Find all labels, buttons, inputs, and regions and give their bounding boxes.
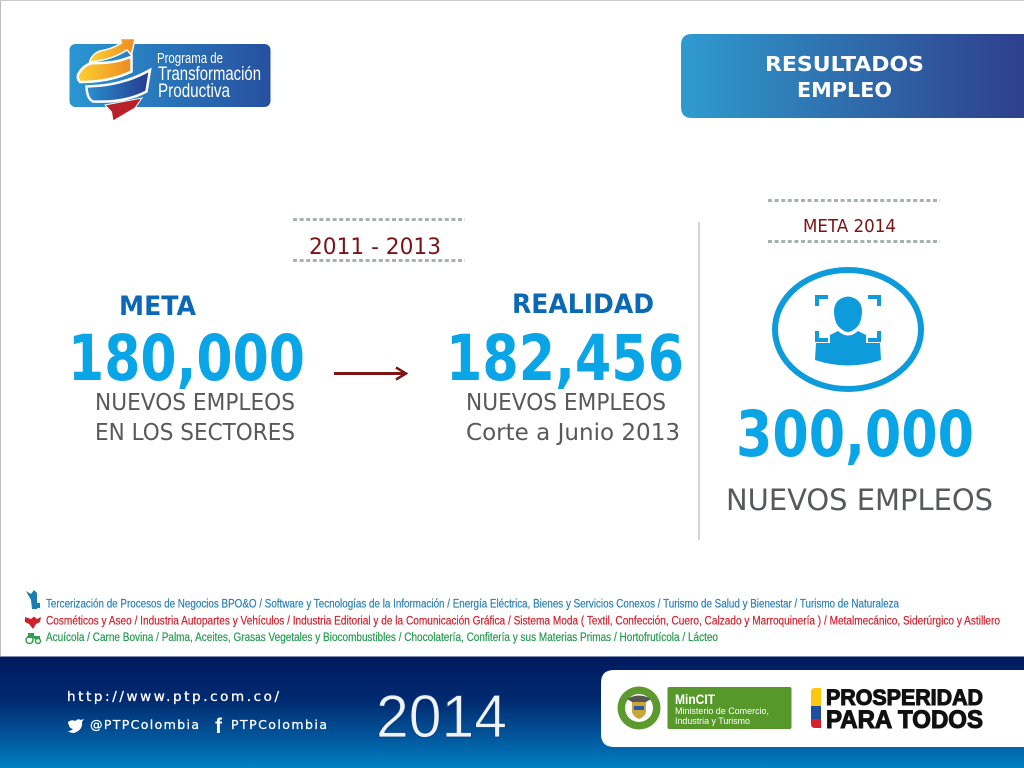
facebook handle: PTPColombia: [231, 717, 327, 732]
text: agro sectors: Acuícola / Carne Bovina / Palma, Aceites, Grasas Vegetales y Biocombustibles / Chocolatería, Confitería y sus Materias Primas / Hortofrutícola / Lácteo: [46, 632, 718, 644]
twitter handle: @PTPColombia: [90, 717, 199, 732]
arrow: meta to realidad: [334, 368, 406, 380]
period label: meta 2014: META 2014: [803, 216, 896, 237]
footer band: [0, 656, 1024, 768]
vertical divider: [698, 222, 700, 540]
icon: facebook f: f: [215, 715, 223, 738]
logo: Programa de Transformación Productiva: [70, 38, 270, 121]
logo: MinCIT: Ministerio de Comercio,: [675, 706, 769, 716]
icon: services person: [26, 590, 40, 609]
period label: 2011 - 2013: 2011 - 2013: [309, 235, 441, 260]
sector list: [25, 590, 1000, 644]
panel: realidad 2011-2013: [446, 289, 684, 446]
logo: MinCIT: MinCIT: [675, 691, 715, 707]
header banner: Resultados Empleo: RESULTADOS: [765, 52, 924, 76]
logo: Programa de Transformación Productiva: Productiva: [158, 80, 230, 102]
panel: meta 2011-2013: EN LOS SECTORES: [95, 420, 295, 446]
panel: meta 2011-2013: [68, 291, 305, 446]
website url: http://www.ptp.com.co/: [67, 689, 279, 705]
panel: realidad 2011-2013: NUEVOS EMPLEOS: [466, 390, 666, 416]
header banner: Resultados Empleo: EMPLEO: [797, 78, 892, 102]
icon: manufacturing: [25, 616, 41, 629]
icon: twitter bird: [68, 719, 84, 733]
panel: realidad 2011-2013: Corte a Junio 2013: [466, 420, 680, 446]
logo: Programa de Transformación Productiva: Transformación: [158, 63, 261, 85]
logo: Prosperidad para todos: [811, 685, 983, 734]
panel: realidad 2011-2013: 182,456: [446, 322, 684, 395]
icon: tractor: [26, 633, 40, 644]
logo: Programa de Transformación Productiva: Programa de: [157, 51, 223, 67]
logo: MinCIT: [668, 687, 792, 729]
panel: meta 2014 figure: [726, 398, 993, 517]
panel: meta 2014 figure: 300,000: [736, 398, 974, 471]
logo: Prosperidad para todos: PROSPERIDAD: [826, 685, 983, 710]
panel: meta 2011-2013: NUEVOS EMPLEOS: [95, 390, 295, 416]
logo: Prosperidad para todos: PARA TODOS: [826, 706, 983, 734]
year: 2014: [376, 683, 507, 750]
footer logos panel: [601, 670, 1024, 747]
logo: MinCIT: Industria y Turismo: [675, 716, 750, 726]
header banner: Resultados Empleo: [681, 34, 1024, 118]
panel: realidad 2011-2013: REALIDAD: [512, 289, 654, 320]
logo: Colombia coat of arms: [618, 686, 660, 730]
icon: person in oval: [775, 270, 921, 389]
panel: meta 2011-2013: 180,000: [68, 322, 305, 395]
panel: meta 2011-2013: META: [119, 291, 196, 322]
panel: meta 2014 figure: NUEVOS EMPLEOS: [726, 483, 993, 517]
text: services sectors: Tercerización de Procesos de Negocios BPO&O / Software y Tecnologías de la Información / Energía Eléctrica, Bienes y Servicios Conexos / Turismo de Salud y Bienestar / Turismo de Naturaleza: [46, 598, 900, 610]
